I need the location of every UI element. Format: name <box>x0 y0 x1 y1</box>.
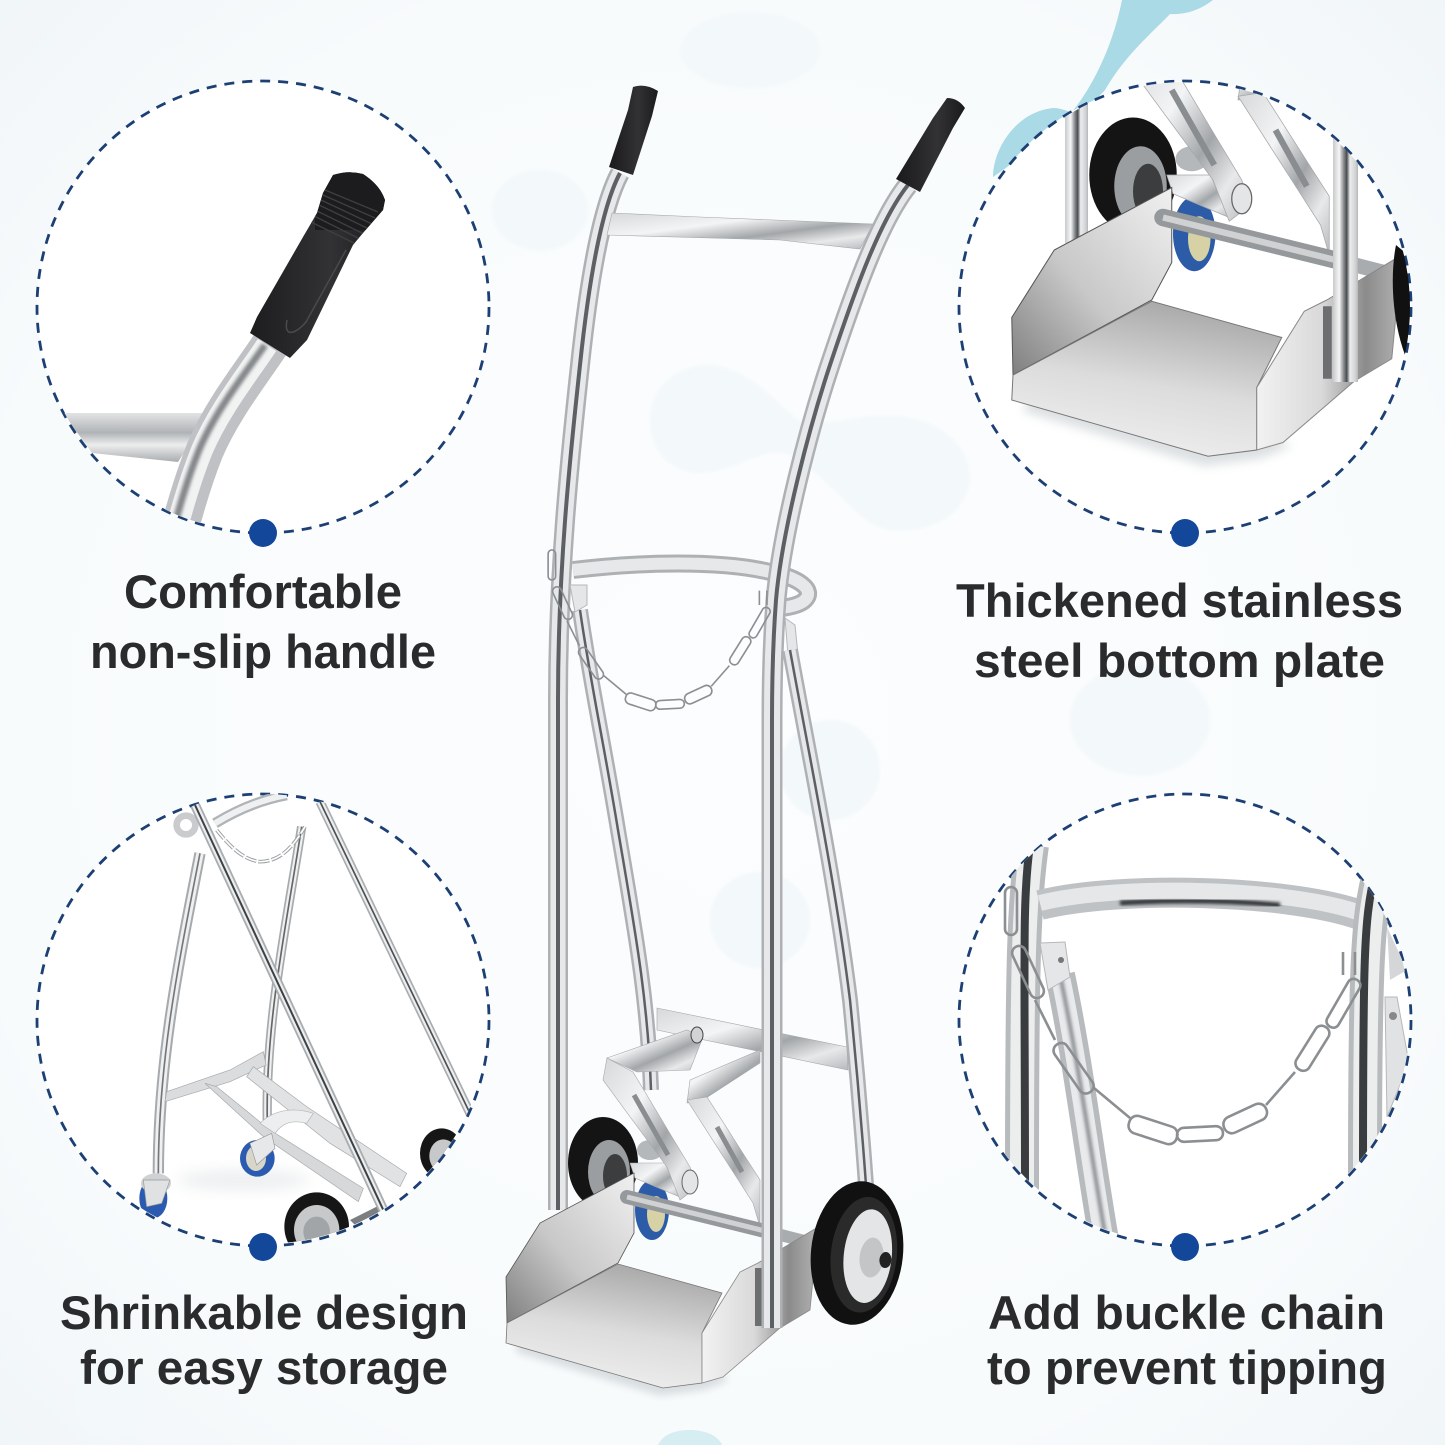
marker dot <box>1171 519 1199 547</box>
caption: Comfortable <box>124 565 402 618</box>
inset circle <box>959 81 1411 533</box>
caption: non-slip handle <box>90 625 436 678</box>
marker dot <box>249 1233 277 1261</box>
caption: for easy storage <box>80 1341 448 1394</box>
panel: bottom plate <box>956 80 1412 687</box>
right brace <box>790 650 866 1185</box>
left grip <box>609 86 658 175</box>
caption: to prevent tipping <box>987 1341 1387 1394</box>
inset circle <box>959 794 1411 1246</box>
main hand trolley illustration <box>506 86 965 1396</box>
inset circle <box>37 794 489 1246</box>
right rail <box>772 185 908 1328</box>
caption: Shrinkable design <box>60 1286 468 1339</box>
left rail <box>558 173 620 1210</box>
inset circle <box>37 81 489 533</box>
top cross bar <box>607 213 873 249</box>
ring support <box>573 564 808 608</box>
caption: Add buckle chain <box>988 1286 1385 1339</box>
panel: shrinkable design <box>37 794 489 1394</box>
right grip <box>896 98 965 192</box>
marker dot <box>1171 1233 1199 1261</box>
rear brace <box>580 610 651 1090</box>
marker dot <box>249 519 277 547</box>
folding bar <box>657 1008 848 1070</box>
decorative teal blob <box>993 0 1213 177</box>
lower assembly: plate, wheel, arms <box>506 1027 818 1396</box>
chain <box>548 550 772 712</box>
panel: comfortable handle <box>37 81 489 678</box>
caption: Thickened stainless <box>956 574 1403 627</box>
handle close-up <box>63 165 390 535</box>
caption: steel bottom plate <box>974 634 1385 687</box>
chain close-up <box>1005 845 1409 1240</box>
brace brackets <box>570 585 800 680</box>
bottom plate close-up <box>1012 5 1414 466</box>
panel: buckle chain <box>959 794 1411 1394</box>
right wheel <box>804 1177 910 1329</box>
folded trolley illustration <box>139 795 470 1261</box>
